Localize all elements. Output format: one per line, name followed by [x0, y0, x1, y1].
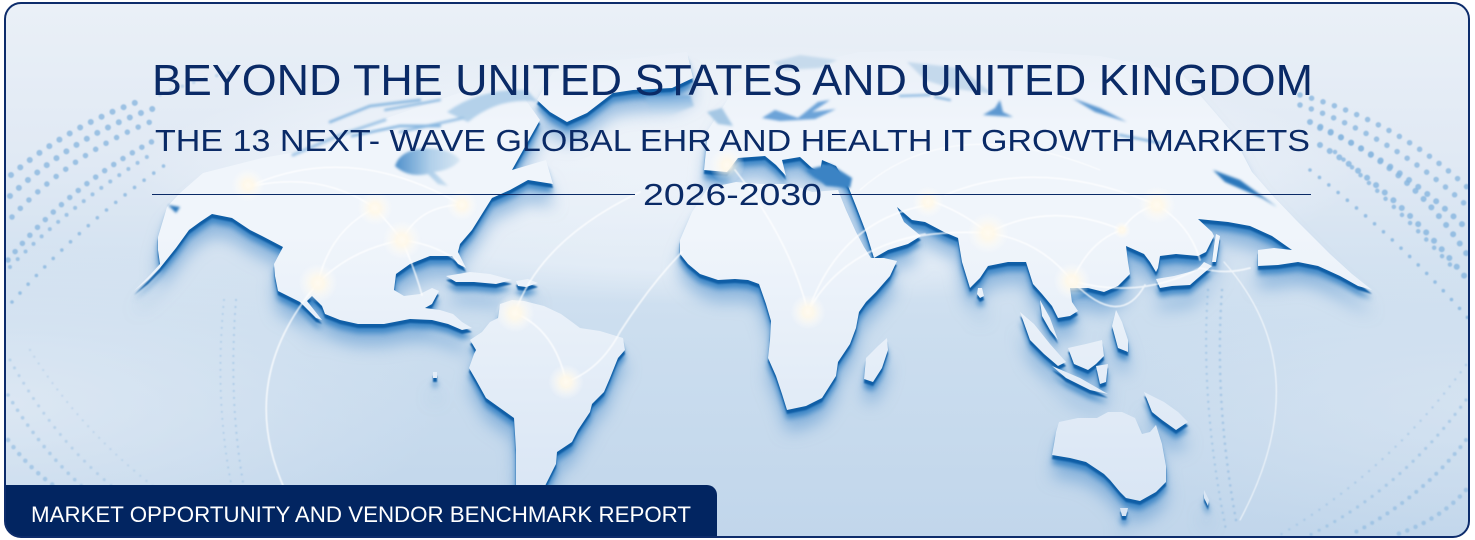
- south america: [469, 300, 625, 492]
- sumatra: [1020, 312, 1066, 366]
- eurasia: [704, 50, 1372, 318]
- arctic channels: [293, 95, 1160, 155]
- report label tab: MARKET OPPORTUNITY AND VENDOR BENCHMARK REPORT: [31, 502, 691, 527]
- glowing network nodes: [231, 147, 1176, 400]
- baltic sea: [762, 100, 836, 121]
- new guinea: [1144, 392, 1188, 430]
- hispaniola: [516, 279, 538, 287]
- continents: [134, 50, 1372, 516]
- arctic and inland water details: [168, 55, 1277, 213]
- new zealand: [1204, 490, 1209, 506]
- svalbard: [773, 55, 837, 70]
- baffin bay: [447, 90, 538, 122]
- borneo: [1068, 340, 1104, 370]
- greenland sea shadow: [645, 95, 694, 114]
- malay peninsula: [1040, 300, 1058, 340]
- hudson bay: [395, 148, 460, 186]
- sakhalin: [1212, 234, 1220, 262]
- australia: [1052, 412, 1166, 501]
- tasmania: [1120, 508, 1128, 516]
- subtitle: THE 13 NEXT- WAVE GLOBAL EHR AND HEALTH IT GROWTH MARKETS: [155, 123, 1310, 158]
- taimyr coast: [983, 100, 1013, 117]
- north america: [134, 92, 553, 330]
- philippines: [1112, 310, 1128, 352]
- africa: [680, 182, 897, 410]
- greenland: [537, 52, 693, 122]
- java: [1052, 366, 1108, 394]
- laptev coast: [1072, 98, 1127, 122]
- british isles: [707, 108, 733, 126]
- network arcs: [248, 144, 1276, 520]
- sulawesi: [1096, 364, 1108, 384]
- kara sea: [907, 62, 993, 94]
- sri lanka: [977, 288, 984, 298]
- world map: [134, 50, 1372, 520]
- galapagos: [433, 372, 437, 378]
- japan: [1156, 262, 1212, 288]
- madagascar: [864, 338, 888, 382]
- black sea and eastern mediterranean: [806, 164, 852, 188]
- siberian coast: [1213, 170, 1277, 207]
- cuba: [446, 272, 512, 284]
- year range with divider rule: 2026-2030: [643, 177, 822, 212]
- alaska inlet: [168, 205, 180, 213]
- report label tab: [5, 485, 717, 537]
- title: BEYOND THE UNITED STATES AND UNITED KINGDOM: [152, 56, 1313, 105]
